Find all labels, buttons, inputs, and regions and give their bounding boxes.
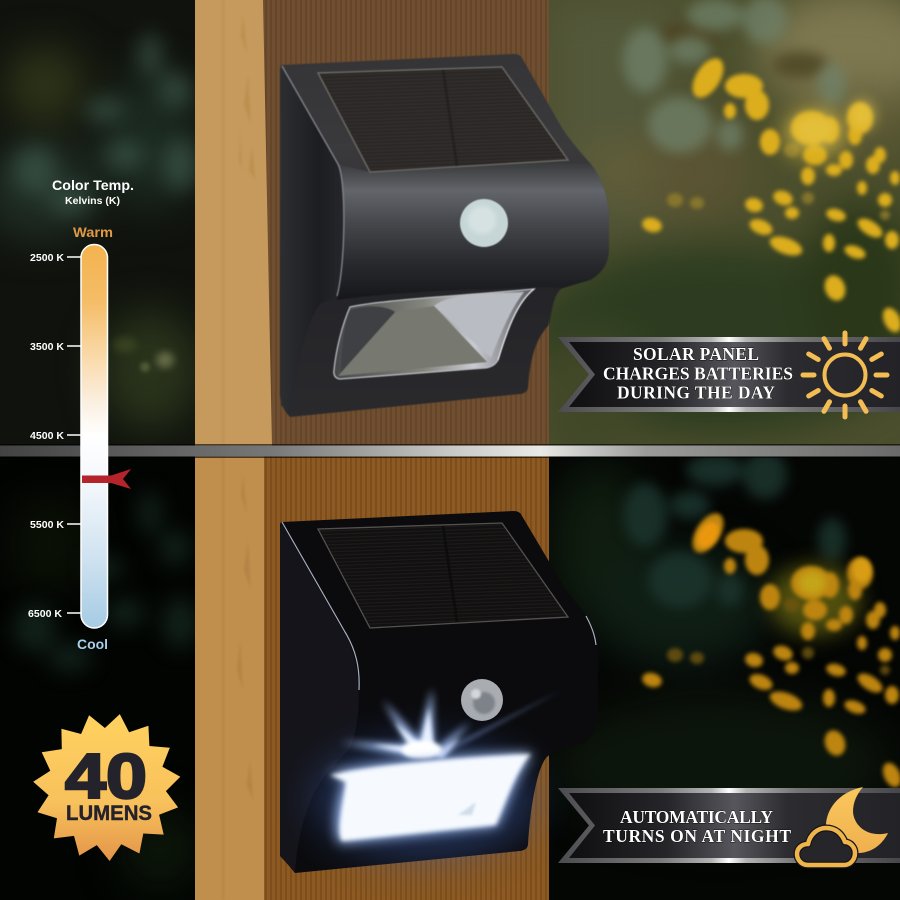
ribbon text: AUTOMATICALLY (620, 807, 773, 827)
wooden post: night (195, 456, 549, 900)
cool label: Cool (77, 637, 108, 652)
ribbon text: DURING THE DAY (617, 382, 775, 402)
ribbon text: TURNS ON AT NIGHT (603, 826, 791, 846)
ribbon text: SOLAR PANEL (633, 344, 759, 364)
solar light: daytime (280, 54, 609, 417)
icon: cloud outline (797, 828, 855, 865)
curved front housing (337, 160, 609, 300)
wooden post: daytime (195, 0, 549, 446)
icon: sun (803, 333, 887, 417)
icon: moon (826, 787, 888, 853)
background: night foliage right (549, 456, 900, 824)
badge: 40 lumens: LUMENS (66, 802, 152, 825)
rear side face (280, 67, 345, 416)
heading: Kelvins (K) (65, 196, 120, 207)
tick labels (28, 252, 81, 620)
illuminated lens (328, 753, 533, 843)
motion sensor (461, 679, 503, 721)
red marker arrow (82, 469, 131, 489)
warm label: Warm (73, 225, 113, 240)
background: night foliage left (6, 486, 195, 899)
ribbon text: CHARGES BATTERIES (603, 364, 793, 384)
tick labels: 5500 K (30, 519, 64, 531)
lens (334, 289, 534, 379)
solar panel (318, 67, 568, 172)
heading (52, 178, 134, 207)
ribbon text (603, 344, 793, 402)
solar light: night (280, 511, 598, 873)
ribbon text (603, 807, 791, 846)
solar panel (318, 523, 568, 628)
top edge highlight (282, 66, 344, 296)
lens glow halo (313, 688, 562, 860)
heading: Color Temp. (52, 178, 134, 193)
horizontal divider (0, 444, 900, 458)
rear side face (280, 524, 359, 872)
background: daytime foliage right (549, 0, 900, 446)
tick labels: 3500 K (30, 341, 64, 353)
color temperature scale (28, 178, 134, 652)
badge: 40 lumens (33, 714, 180, 861)
light body silhouette (280, 54, 609, 417)
tick labels: 6500 K (28, 608, 62, 620)
ribbon: automatically turns on at night (558, 787, 900, 865)
badge: 40 lumens: 40 (65, 742, 147, 812)
light body silhouette (280, 511, 598, 873)
background: daytime foliage left (0, 0, 200, 446)
motion sensor (460, 199, 508, 247)
thermometer bar (81, 244, 108, 628)
edge highlights (282, 522, 596, 690)
icon: cloud fill (797, 828, 855, 865)
tick labels: 4500 K (30, 430, 64, 442)
tick labels: 2500 K (30, 252, 64, 264)
ribbon: solar panel charges batteries (558, 333, 900, 417)
